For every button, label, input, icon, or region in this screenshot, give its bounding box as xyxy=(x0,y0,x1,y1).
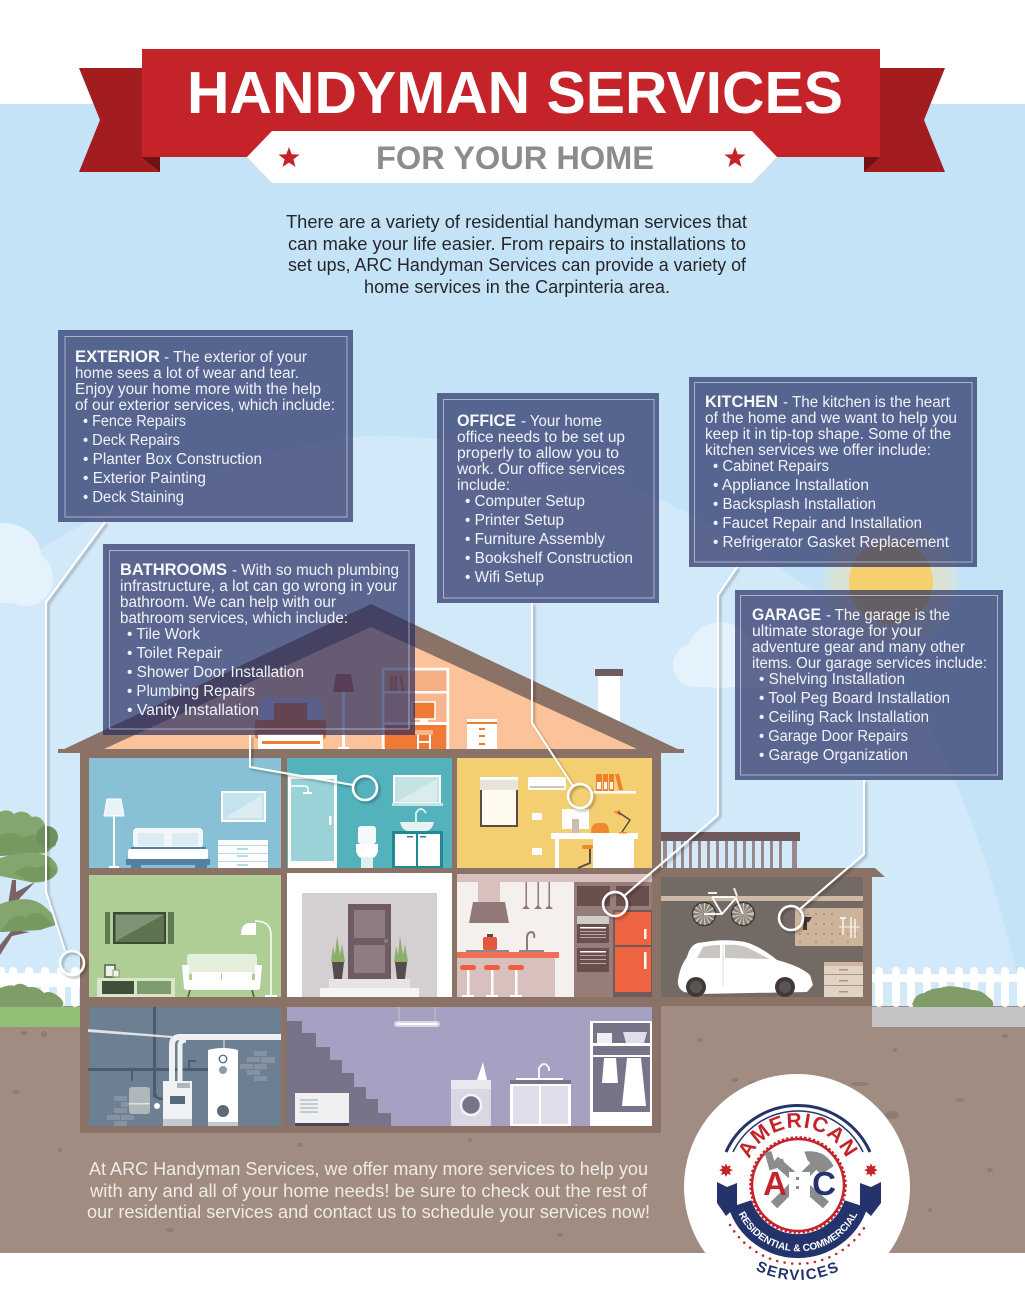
logo: ✸ xyxy=(863,1163,878,1180)
list: bathroom services: • Plumbing Repairs xyxy=(127,683,255,700)
heading: kitchen: KITCHEN xyxy=(705,392,778,411)
text: exterior description: of our exterior services, which include: xyxy=(75,397,335,414)
logo centre marks xyxy=(796,1177,799,1189)
text: kitchen description: keep it in tip-top shape. Some of the xyxy=(705,426,951,443)
list: garage services: • Shelving Installation xyxy=(759,671,905,688)
list: office services: • Bookshelf Construction xyxy=(465,550,633,567)
room: utility basement xyxy=(88,1007,281,1126)
callout line: kitchen xyxy=(603,567,737,916)
heading: office: OFFICE xyxy=(457,411,516,430)
list: kitchen services: • Refrigerator Gasket Replacement xyxy=(713,534,950,551)
roof xyxy=(58,604,684,752)
closing text: At ARC Handyman Services, we offer many more services to help you xyxy=(89,1159,648,1179)
room: kitchen xyxy=(457,874,652,997)
callout line: bathrooms xyxy=(250,735,377,800)
text: garage description: adventure gear and many other xyxy=(752,639,965,656)
subtitle: FOR YOUR HOME xyxy=(376,140,654,176)
logo: AMERICAN xyxy=(740,1113,858,1158)
text: office description: include: xyxy=(457,477,510,494)
logo: SERVICES xyxy=(756,1262,838,1280)
list: bathroom services: • Shower Door Installation xyxy=(127,664,304,681)
list: office services: • Computer Setup xyxy=(465,493,585,510)
text: office description: office needs to be set up xyxy=(457,429,625,446)
attic furniture xyxy=(255,669,497,749)
fence right xyxy=(872,967,1025,1007)
list: bathroom services: • Vanity Installation xyxy=(127,702,259,719)
sky background xyxy=(0,104,1025,1014)
closing text xyxy=(87,1159,650,1222)
list: office services xyxy=(465,493,633,586)
panel: office xyxy=(437,393,659,603)
list: garage services: • Tool Peg Board Installation xyxy=(759,690,950,707)
list: kitchen services: • Cabinet Repairs xyxy=(713,458,829,475)
room: bathroom xyxy=(287,758,452,868)
title: HANDYMAN SERVICES xyxy=(187,60,843,126)
list: bathroom services xyxy=(127,626,304,719)
heading: exterior: EXTERIOR xyxy=(75,347,160,366)
list: kitchen services xyxy=(713,458,950,551)
text: garage description: - The garage is the xyxy=(826,607,950,624)
list: exterior services: • Fence Repairs xyxy=(83,413,186,430)
bicycle xyxy=(692,888,754,926)
panel: bathrooms xyxy=(103,544,415,735)
text: bathrooms description: bathroom services, which include: xyxy=(120,610,348,627)
room: office xyxy=(457,758,652,868)
icon: star right xyxy=(724,147,746,167)
list: kitchen services: • Appliance Installation xyxy=(713,477,869,494)
list: exterior services: • Deck Staining xyxy=(83,489,184,506)
icon: star left xyxy=(278,147,300,167)
room: bedroom xyxy=(89,758,281,868)
intro text xyxy=(286,212,747,297)
bottom white strip xyxy=(0,1253,1025,1305)
list: garage services: • Garage Organization xyxy=(759,747,908,764)
text: bathrooms description: bathroom. We can help with our xyxy=(120,594,336,611)
list: office services: • Printer Setup xyxy=(465,512,564,529)
bush left xyxy=(0,984,63,1007)
list: bathroom services: • Toilet Repair xyxy=(127,645,222,662)
logo xyxy=(684,1074,910,1280)
logo tools xyxy=(768,1152,833,1205)
room: entry xyxy=(287,873,452,997)
callout line: garage xyxy=(779,780,864,930)
text: garage description: items. Our garage services include: xyxy=(752,655,987,672)
list: office services: • Wifi Setup xyxy=(465,569,544,586)
text: garage description: ultimate storage for your xyxy=(752,623,922,640)
list: exterior services: • Deck Repairs xyxy=(83,432,180,449)
text: exterior description xyxy=(75,349,335,414)
panel: exterior xyxy=(58,330,353,522)
list: exterior services xyxy=(83,413,262,506)
house walls xyxy=(58,749,885,1133)
list: exterior services: • Exterior Painting xyxy=(83,470,206,487)
ground specks xyxy=(12,1031,1008,1237)
cloud right xyxy=(673,622,795,688)
list: bathroom services: • Tile Work xyxy=(127,626,200,643)
fence left xyxy=(0,967,80,1007)
list: garage services: • Ceiling Rack Installation xyxy=(759,709,929,726)
panel: garage xyxy=(735,590,1003,780)
bush right xyxy=(912,986,993,1007)
car xyxy=(678,940,813,997)
text: kitchen description: - The kitchen is the heart xyxy=(783,394,951,411)
sun xyxy=(824,515,958,649)
text: kitchen description: kitchen services we offer include: xyxy=(705,442,931,459)
intro text: can make your life easier. From repairs to installations to xyxy=(288,234,746,254)
heading: garage: GARAGE xyxy=(752,605,821,624)
text: exterior description: home sees a lot of wear and tear. xyxy=(75,365,299,382)
intro text: home services in the Carpinteria area. xyxy=(364,277,670,297)
panel: kitchen xyxy=(689,377,977,567)
intro text: There are a variety of residential handyman services that xyxy=(286,212,747,232)
list: exterior services: • Planter Box Construction xyxy=(83,451,262,468)
closing text: our residential services and contact us to schedule your services now! xyxy=(87,1202,650,1222)
ground xyxy=(0,1006,1025,1253)
tree xyxy=(0,810,58,955)
pegboard xyxy=(795,908,863,946)
intro text: set ups, ARC Handyman Services can provide a variety of xyxy=(288,255,747,275)
text: bathrooms description xyxy=(120,562,399,627)
banner ribbon xyxy=(79,49,945,183)
logo: ✸ xyxy=(718,1163,733,1180)
garage drawers xyxy=(824,962,863,997)
text: office description: properly to allow you to xyxy=(457,445,619,462)
text: exterior description: Enjoy your home more with the help xyxy=(75,381,321,398)
deck railing xyxy=(661,832,800,868)
callout line: exterior xyxy=(46,522,105,975)
heading: bathrooms: BATHROOMS xyxy=(120,560,227,579)
text: office description: work. Our office services xyxy=(456,461,625,478)
closing text: with any and all of your home needs! be sure to check out the rest of xyxy=(89,1181,648,1201)
list: garage services: • Garage Door Repairs xyxy=(759,728,908,745)
text: garage description xyxy=(752,607,987,672)
room: living room xyxy=(89,875,281,997)
text: kitchen description: of the home and we want to help you xyxy=(705,410,957,427)
logo tools centre mask xyxy=(789,1172,810,1196)
text: kitchen description xyxy=(705,394,957,459)
room: laundry basement xyxy=(287,1007,652,1126)
sidewalk xyxy=(872,1007,1025,1027)
logo: C xyxy=(812,1165,836,1202)
text: bathrooms description: infrastructure, a lot can go wrong in your xyxy=(120,578,397,595)
logo: A xyxy=(763,1165,787,1202)
list: kitchen services: • Backsplash Installation xyxy=(713,496,876,513)
callout line: office xyxy=(532,603,592,808)
cloud left xyxy=(0,523,53,606)
text: exterior description: - The exterior of your xyxy=(164,349,307,366)
grass strip xyxy=(0,1007,80,1027)
list: garage services xyxy=(759,671,950,764)
list: office services: • Furniture Assembly xyxy=(465,531,605,548)
list: kitchen services: • Faucet Repair and Installation xyxy=(713,515,922,532)
text: office description xyxy=(456,413,625,494)
text: office description: - Your home xyxy=(521,413,602,430)
text: bathrooms description: - With so much plumbing xyxy=(232,562,399,579)
logo: RESIDENTIAL & COMMERCIAL xyxy=(738,1211,858,1252)
chimney xyxy=(595,669,623,726)
room: garage xyxy=(661,877,863,997)
